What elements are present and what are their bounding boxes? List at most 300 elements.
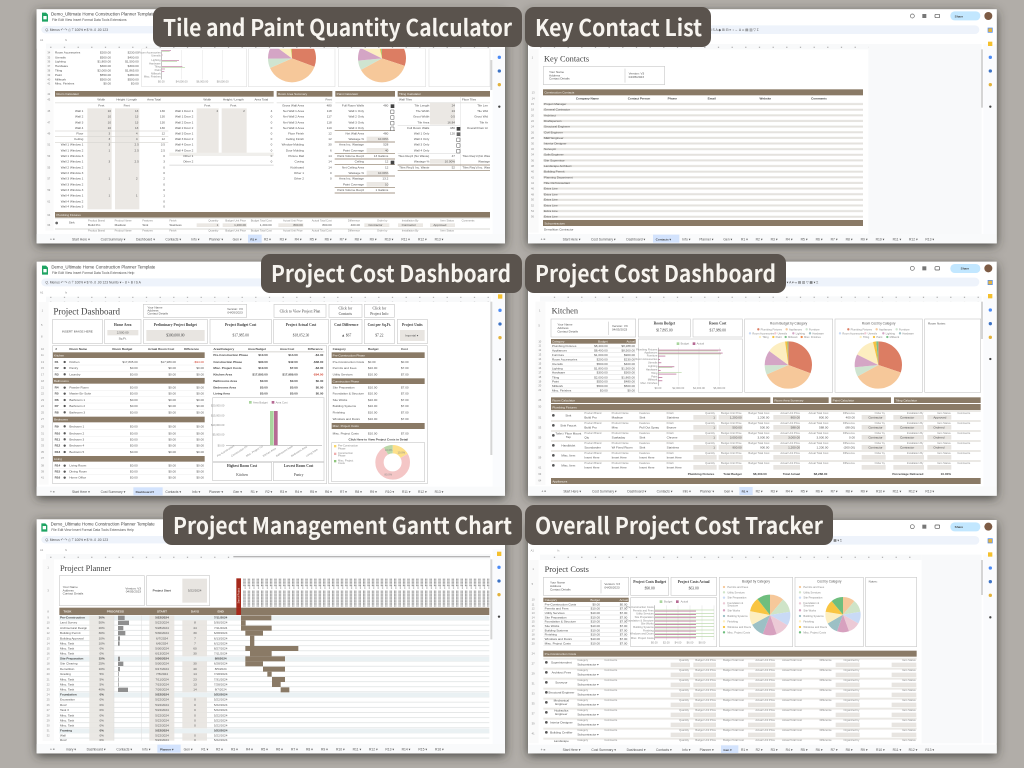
sheet tabs	[37, 744, 505, 753]
pre-construction cost item rows: Category	[577, 718, 589, 722]
row numbers: 5	[532, 582, 534, 586]
tiling calculator table: Tile Ar	[479, 120, 488, 124]
room calculator table: 2.5	[135, 160, 139, 164]
bar chart: budget versus actual: Room Accessories	[139, 51, 161, 55]
plumbing fixture item rows: Budget Unit Price	[721, 431, 742, 435]
task rows: 8/5/2024	[215, 667, 227, 671]
bar chart: area budget versus area cost: $5,000.00	[213, 433, 225, 437]
door and other openings table: 0	[271, 143, 273, 147]
category cost table: $0.00	[592, 602, 600, 606]
bar chart: budget versus actual	[626, 598, 717, 647]
room calculator table: 10	[108, 120, 111, 124]
plumbing fixture item rows: Product Brand	[584, 461, 602, 465]
task rows: 7	[194, 641, 196, 645]
plumbing fixture item rows: Product Name	[612, 411, 629, 415]
row numbers: 52	[531, 203, 534, 207]
plumbing fixture item rows: Budget Total Cost	[748, 411, 770, 415]
area cost table: $0.00	[260, 392, 268, 396]
plumbing fixture item rows: 1,200.00	[816, 445, 829, 449]
plumbing fixtures section: Budget Unit Price	[225, 219, 247, 223]
plumbing fixture item rows: 3,000.00	[757, 435, 770, 439]
plumbing fixture item rows: Difference	[843, 421, 856, 425]
row numbers: 29	[41, 424, 44, 428]
task rows: 40%	[99, 688, 105, 692]
sheet tabs: Planner ▾	[700, 490, 714, 494]
cost table: $480.00	[128, 73, 139, 77]
plumbing fixture item rows: Ordered	[933, 445, 945, 449]
plumbing fixture item rows: Product Brand	[584, 411, 602, 415]
link buttons: Click to View Project Plan	[280, 309, 320, 313]
row numbers: 38	[531, 164, 534, 168]
sheet tabs: Dashboard ▾	[136, 237, 155, 241]
task rows: 8/27/2024	[214, 646, 228, 650]
dashboard heading: Project Dashboard	[53, 306, 120, 316]
row numbers: 14	[47, 641, 50, 645]
project cost category table: $10.00	[368, 366, 378, 370]
pre-construction cost item rows: Actual Unit Price	[755, 678, 776, 682]
room calculator table: 130	[160, 120, 165, 124]
plumbing fixture item rows: Build Pro	[584, 415, 597, 419]
bar chart: area budget versus area cost: Pre-Construction	[216, 444, 236, 458]
pre-construction cost item rows: Category	[577, 658, 589, 662]
pre-construction cost item rows: Actual Unit Price	[755, 668, 776, 672]
plumbing fixtures totals row: 10.00%	[941, 472, 951, 476]
row numbers: 12	[532, 607, 535, 611]
room calculator table: Wall 1 Window 1	[61, 143, 84, 147]
task rows: Misc. Task	[60, 646, 75, 650]
category cost table: Paint	[552, 380, 559, 384]
pre-construction cost item rows: Budget Unit Price	[695, 728, 717, 732]
heading label: tile and paint quantity calculator: Tile and Paint Quantity Calculator	[163, 9, 513, 43]
room cost table: $0.00	[130, 398, 138, 402]
plumbing fixture item rows: Handbidet	[561, 443, 575, 447]
row numbers: 35	[532, 701, 535, 705]
task rows: 14	[193, 688, 197, 692]
row numbers: 15	[538, 362, 542, 366]
row numbers: 43	[47, 98, 51, 102]
section headers: Tiling Calculator	[399, 92, 421, 96]
plumbing fixture item rows: 1	[713, 415, 715, 419]
construction contacts table: Structural Engineer	[544, 125, 570, 129]
task rows: 8/7/2024	[215, 688, 227, 692]
sheet tabs: R1 ▾	[201, 747, 209, 751]
row numbers: 49	[47, 131, 51, 135]
project cost category table: Misc. Project Costs	[333, 431, 359, 435]
row numbers: 14	[532, 96, 535, 100]
task rows: 5/22/2024	[155, 698, 169, 702]
pie chart: room cost by category: Plumbing Fixtures	[851, 327, 873, 331]
room cost table: Bedroom 5	[69, 450, 85, 454]
task rows: Misc. Task	[60, 724, 75, 728]
room area summary table: 0	[330, 177, 332, 181]
bar chart: budget versus actual: Appliances	[644, 350, 658, 354]
pre-construction cost item rows: Difference	[820, 688, 832, 692]
pre-construction cost item rows: Actual Total Cost	[782, 668, 802, 672]
category cost table: $7.00	[620, 633, 628, 637]
project cost category table: $7.00	[401, 431, 409, 435]
room cost table: Room Budget	[112, 347, 132, 351]
door and other openings table: Wall 1 Door 2	[175, 115, 194, 119]
panel: overall project cost tracker screenshot	[528, 520, 997, 753]
project cost category table: $7.00	[401, 417, 409, 421]
task table header: END	[217, 609, 225, 613]
business details box: Your Name	[63, 585, 78, 589]
business details box: 04/05/2023	[629, 75, 644, 79]
task rows: 0%	[99, 652, 104, 656]
plumbing fixtures section: Finish	[169, 219, 177, 223]
row numbers: 13	[532, 90, 535, 94]
cost table: $500.00	[128, 77, 139, 81]
row numbers: 13	[41, 360, 44, 364]
paint calculator table: 528	[383, 143, 389, 147]
right sidebar icons	[981, 280, 997, 486]
sheet tabs: R3 ▾	[280, 237, 287, 241]
sheet tabs: R5 ▾	[310, 490, 317, 494]
sheet tabs: R3 ▾	[771, 748, 778, 752]
row numbers: 41	[47, 82, 51, 86]
bar chart: budget versus actual: $0.00	[158, 80, 165, 84]
pre-construction cost item rows: Actual Unit Price	[755, 728, 776, 732]
construction contacts table: MEP Engineer	[544, 136, 564, 140]
room calculator table: 12	[162, 131, 165, 135]
pre-construction costs section header: Pre-Construction Costs	[545, 652, 577, 656]
room calculator table: 1	[108, 194, 110, 198]
plumbing fixture item rows: Insert Here	[667, 455, 682, 459]
sheet tabs: R12 ▾	[369, 747, 378, 751]
plumbing fixture item rows: Budget Unit Price	[721, 461, 742, 465]
area cost table: $42.00	[288, 360, 298, 364]
project cost category table: Site Works	[333, 398, 348, 402]
row numbers: 29	[47, 718, 50, 722]
sheet tabs: R13 ▾	[925, 237, 934, 241]
plumbing fixtures section: Quantity	[208, 229, 219, 233]
cost table: $0.00	[131, 82, 139, 86]
plumbing fixture item rows: Misc. Item	[561, 463, 576, 467]
task rows: 7/28/2024	[214, 682, 228, 686]
donut chart: project costs by phase: Costs	[338, 461, 345, 465]
sheet background	[528, 9, 997, 243]
room calculator table: 3	[108, 160, 110, 164]
row numbers: 31	[47, 729, 50, 733]
notes box: Notes:	[869, 580, 878, 584]
sheet tabs: R10 ▾	[876, 748, 885, 752]
sheet tabs: R8 ▾	[306, 747, 313, 751]
pre-construction cost item rows: Difference	[820, 698, 832, 702]
pre-construction cost item rows: Category	[577, 708, 589, 712]
bar chart: budget versus actual: $6,000.00	[196, 80, 209, 84]
room cost table: $0.00	[168, 392, 176, 396]
room area summary table: Window Molding	[282, 143, 304, 147]
sheet tabs: Gen ▾	[723, 237, 733, 241]
link buttons: Click for	[338, 307, 353, 311]
room cost table: $0.00	[196, 470, 204, 474]
task rows: 7/11/2024	[214, 652, 228, 656]
row numbers: 45	[47, 109, 51, 113]
category cost table: Misc. Project Costs	[545, 641, 571, 645]
task rows: 0%	[99, 724, 104, 728]
row numbers: 16	[538, 366, 542, 370]
project cost category table: $10.00	[368, 431, 378, 435]
section headers: Tiling Calculator	[895, 398, 917, 402]
room calculator table: Floor	[76, 131, 83, 135]
tiling calculator table: Tile Len	[477, 103, 488, 107]
room calculator table: 2.5	[135, 148, 139, 152]
pre-construction cost item rows: Category	[577, 668, 589, 672]
project cost category table: $7.00	[401, 410, 409, 414]
room cost table: $0.00	[130, 404, 138, 408]
pre-construction cost item rows: Quantity	[679, 688, 690, 692]
bar chart: budget versus actual: Budget	[664, 600, 673, 604]
row numbers: 47	[47, 120, 51, 124]
room calculator table: 0	[163, 165, 165, 169]
category cost table	[543, 598, 629, 646]
sheet tabs: R3 ▾	[771, 237, 778, 241]
pre-construction cost item rows: Organized by	[844, 738, 860, 742]
pie chart: room budget by category: Appliances	[789, 327, 803, 331]
summary cards: $17,985.00	[232, 334, 249, 339]
bar chart: area budget versus area cost	[211, 398, 324, 462]
sheet tabs: Contacts ▾	[656, 748, 672, 752]
task rows: 6/7/2024	[156, 636, 168, 640]
bar chart: budget versus actual: Tiling	[154, 65, 161, 69]
tiling calculator table: Wall 3 Only	[414, 143, 430, 147]
category cost table: Permits and Fees	[545, 607, 569, 611]
bar chart: budget versus actual: Millwork	[648, 378, 658, 382]
row numbers: 64	[47, 213, 51, 217]
pre-construction cost item rows: Engineer	[555, 702, 567, 706]
row numbers: 31	[41, 431, 44, 435]
plumbing fixture item rows: Contractor	[900, 415, 914, 419]
row numbers: 46	[531, 187, 534, 191]
pie chart: cost by category: Structure	[803, 604, 815, 608]
room cost table: Bedroom 4	[69, 444, 85, 448]
category cost table: Furniture	[552, 353, 564, 357]
project cost category table: Permits and Fees	[333, 366, 357, 370]
sheet tabs: R4 ▾	[295, 490, 302, 494]
pie chart: cost by category	[338, 46, 426, 87]
summary cards: Cost per Sq.Ft.	[368, 323, 391, 327]
room area summary table: Feet	[326, 98, 332, 102]
heading label: overall project cost tracker: Overall Project Cost Tracker	[535, 507, 824, 541]
sheet tabs	[528, 745, 997, 753]
project cost category table: Cost	[401, 347, 408, 351]
plumbing fixture item rows: Comments	[957, 431, 971, 435]
row numbers: 44	[531, 181, 534, 185]
category cost table: Pre-Construction Costs	[545, 602, 577, 606]
room budget and cost cards	[638, 319, 742, 337]
area cost table: Difference	[308, 347, 323, 351]
pre-construction cost item rows: Building Certifier	[550, 730, 573, 734]
plumbing fixture item rows: (300.00)	[844, 445, 855, 449]
pre-construction cost item rows: Category	[577, 678, 589, 682]
task rows: 5/22/2024	[214, 718, 228, 722]
task rows: 5/30/2024	[155, 631, 169, 635]
task rows: 5/22/2024	[214, 698, 228, 702]
plumbing fixture item rows: Actual Total Cost	[808, 461, 829, 465]
row numbers: 32	[41, 437, 44, 441]
task rows: 15%	[99, 657, 105, 661]
bar chart: budget versus actual: Finishing	[643, 628, 654, 632]
donut chart: project costs by phase: 80.0%	[385, 473, 393, 477]
sheet background	[528, 262, 997, 496]
pie chart: room cost by category: Tiling	[863, 335, 870, 339]
construction contacts table: Extra Line	[544, 203, 558, 207]
task rows: 44	[193, 626, 197, 630]
pie chart: room budget by category: Paint	[776, 335, 782, 339]
bar chart: budget versus actual: $6,000.00	[713, 386, 726, 390]
bar chart: area budget versus area cost: Kitchen Area	[262, 446, 277, 458]
construction contacts table: General Contractor	[544, 108, 570, 112]
task rows: 5/22/2024	[214, 693, 228, 697]
pie chart: room cost by category: Paint	[876, 335, 883, 339]
sheet tabs: R6 ▾	[816, 237, 823, 241]
door and other openings table: 0	[271, 148, 273, 152]
door and other openings table: Other 2	[183, 160, 194, 164]
category cost table: $230.00	[624, 357, 635, 361]
area cost table: -$38.00	[313, 360, 324, 364]
pie chart: budget by category: Permits and Fees	[727, 585, 749, 589]
project cost budget and actual cards: $90.00	[645, 587, 655, 591]
row numbers: 17	[47, 657, 50, 661]
row numbers: 41	[532, 731, 535, 735]
task rows: 0	[194, 738, 196, 742]
task rows: 7/5/2024	[156, 672, 168, 676]
sheet tabs: R1 ▾	[741, 748, 748, 752]
pre-construction cost item rows: Comments	[604, 668, 618, 672]
task rows: 7/26/2024	[155, 688, 169, 692]
room cost table: $0.00	[130, 470, 138, 474]
pre-construction cost item rows: Budget Total Cost	[723, 708, 744, 712]
sheet tabs: R2 ▾	[265, 490, 273, 494]
room cost table: $0.00	[130, 464, 138, 468]
sheet tabs: R16 ▾	[435, 747, 444, 751]
sheet tabs: R10 ▾	[876, 237, 885, 241]
tiling calculator table: Tile Area	[417, 120, 430, 124]
row numbers: 63	[538, 472, 542, 476]
plumbing fixture item rows: Build Pro	[584, 425, 597, 429]
row numbers: 54	[531, 209, 534, 213]
pre-construction cost item rows: Budget Unit Price	[695, 718, 717, 722]
paint calculator table: Paint Volume Req'd	[337, 188, 364, 192]
bar chart: budget versus actual: Hardware	[149, 61, 161, 65]
project start date box	[147, 576, 210, 606]
plumbing fixture item rows: Stainless	[667, 445, 680, 449]
room cost table: R8	[55, 410, 59, 414]
pie chart: budget by category: Foundation &	[727, 601, 743, 605]
plumbing fixture item rows: 1,200.00	[757, 415, 770, 419]
sheet tabs: Start Here ▾	[563, 490, 581, 494]
room cost table: $0.00	[130, 410, 138, 414]
row numbers: 39	[532, 721, 535, 725]
sheet tabs: R7 ▾	[831, 748, 838, 752]
plumbing fixture item rows: Actual Unit Price	[780, 431, 801, 435]
plumbing fixture item rows: Product Brand	[584, 431, 602, 435]
sheet tabs: R8 ▾	[846, 237, 853, 241]
room cost table: $0.00	[168, 372, 176, 376]
room cost table: Bathrooms	[54, 379, 69, 383]
row numbers: 19	[47, 667, 50, 671]
room cost table: -$94.00	[194, 360, 204, 364]
pie chart: budget by category: Utility Services	[727, 590, 745, 594]
task rows: Misc. Task	[60, 677, 75, 681]
subcontractors table: Subcontractors	[544, 221, 565, 225]
category cost table: $7.00	[620, 615, 628, 619]
row numbers: 9	[47, 616, 49, 620]
sheet tabs: R11 ▾	[893, 490, 901, 494]
construction contacts table: Interior Designer	[544, 142, 567, 146]
task rows: 7/11/2024	[214, 616, 228, 620]
pre-construction cost item rows: Surveyor	[555, 680, 567, 684]
sheet tabs: R7 ▾	[291, 747, 298, 751]
bar chart: budget versus actual: Utility Services	[636, 612, 654, 616]
bar chart: budget versus actual: $8,000.00	[217, 80, 229, 84]
pre-construction cost item rows: Comments	[604, 678, 618, 682]
section headers: Room Calculator	[56, 92, 79, 96]
spreadsheet chrome: header toolbar: Share	[955, 14, 963, 18]
task rows: 5/28/2024	[155, 626, 169, 630]
task rows: 0%	[99, 698, 104, 702]
plumbing fixture item rows: Actual Total Cost	[808, 441, 829, 445]
sheet tabs: R8 ▾	[355, 490, 362, 494]
plumbing fixture item rows: 1,200.00	[730, 415, 742, 419]
sheet tabs: Planner ▾	[700, 748, 714, 752]
room calculator table: 4	[136, 131, 138, 135]
room cost table: Dining Room	[69, 470, 87, 474]
plumbing fixture item rows: 3,000.00	[788, 435, 800, 439]
plumbing fixture item rows: Difference	[843, 461, 856, 465]
room cost table: $0.00	[196, 476, 204, 480]
pre-construction cost item rows: Item Status	[902, 658, 916, 662]
row numbers: 15	[532, 620, 535, 624]
business details box: Version: V3	[125, 587, 141, 591]
spreadsheet chrome: header toolbar: File Edit View Insert Format Data Tools Extensions	[52, 18, 127, 22]
row numbers: 8	[47, 609, 49, 613]
row numbers: 20	[538, 384, 542, 388]
room area summary table: Net Wall 4 Area	[283, 126, 304, 130]
sheet tabs: Info ▾	[682, 237, 691, 241]
door and other openings table: 2	[243, 109, 245, 113]
project cost category table: $10.00	[368, 410, 378, 414]
sheet tabs: R7 ▾	[831, 237, 838, 241]
task rows: Building Permit	[60, 631, 81, 635]
plumbing fixture item rows: Sink	[565, 413, 572, 417]
pre-construction cost item rows: Subcontractor ▾	[577, 712, 599, 716]
plumbing fixture item rows: 500.00	[732, 425, 742, 429]
category cost table: Foundation & Structure	[545, 620, 576, 624]
construction contacts table	[543, 89, 863, 219]
category cost table: Lighting	[552, 366, 563, 370]
task rows: Site Clearing	[60, 662, 78, 666]
project cost category table: $10.00	[368, 398, 378, 402]
sheet tabs	[528, 234, 997, 243]
category cost table: $0.00	[627, 388, 635, 392]
row numbers: 50	[531, 198, 534, 202]
spreadsheet chrome: header toolbar	[37, 9, 505, 49]
task rows: 5/22/2024	[155, 708, 169, 712]
task rows: 0	[194, 713, 196, 717]
row numbers: 27	[47, 708, 50, 712]
summary cards: 2,500.00	[117, 331, 129, 335]
task rows: 0%	[99, 693, 104, 697]
room cost table: $0.00	[168, 464, 176, 468]
pre-construction cost item rows: Actual Unit Price	[755, 738, 776, 742]
tiling calculator table: Grout Width	[413, 115, 430, 119]
plumbing fixture item rows: Actual Unit Price	[780, 461, 801, 465]
bar chart: budget versus actual: Millwork	[151, 71, 161, 75]
room calculator table: 1	[136, 194, 138, 198]
cost table: $1,800.00	[97, 60, 111, 64]
room cost table: $0.00	[130, 424, 138, 428]
